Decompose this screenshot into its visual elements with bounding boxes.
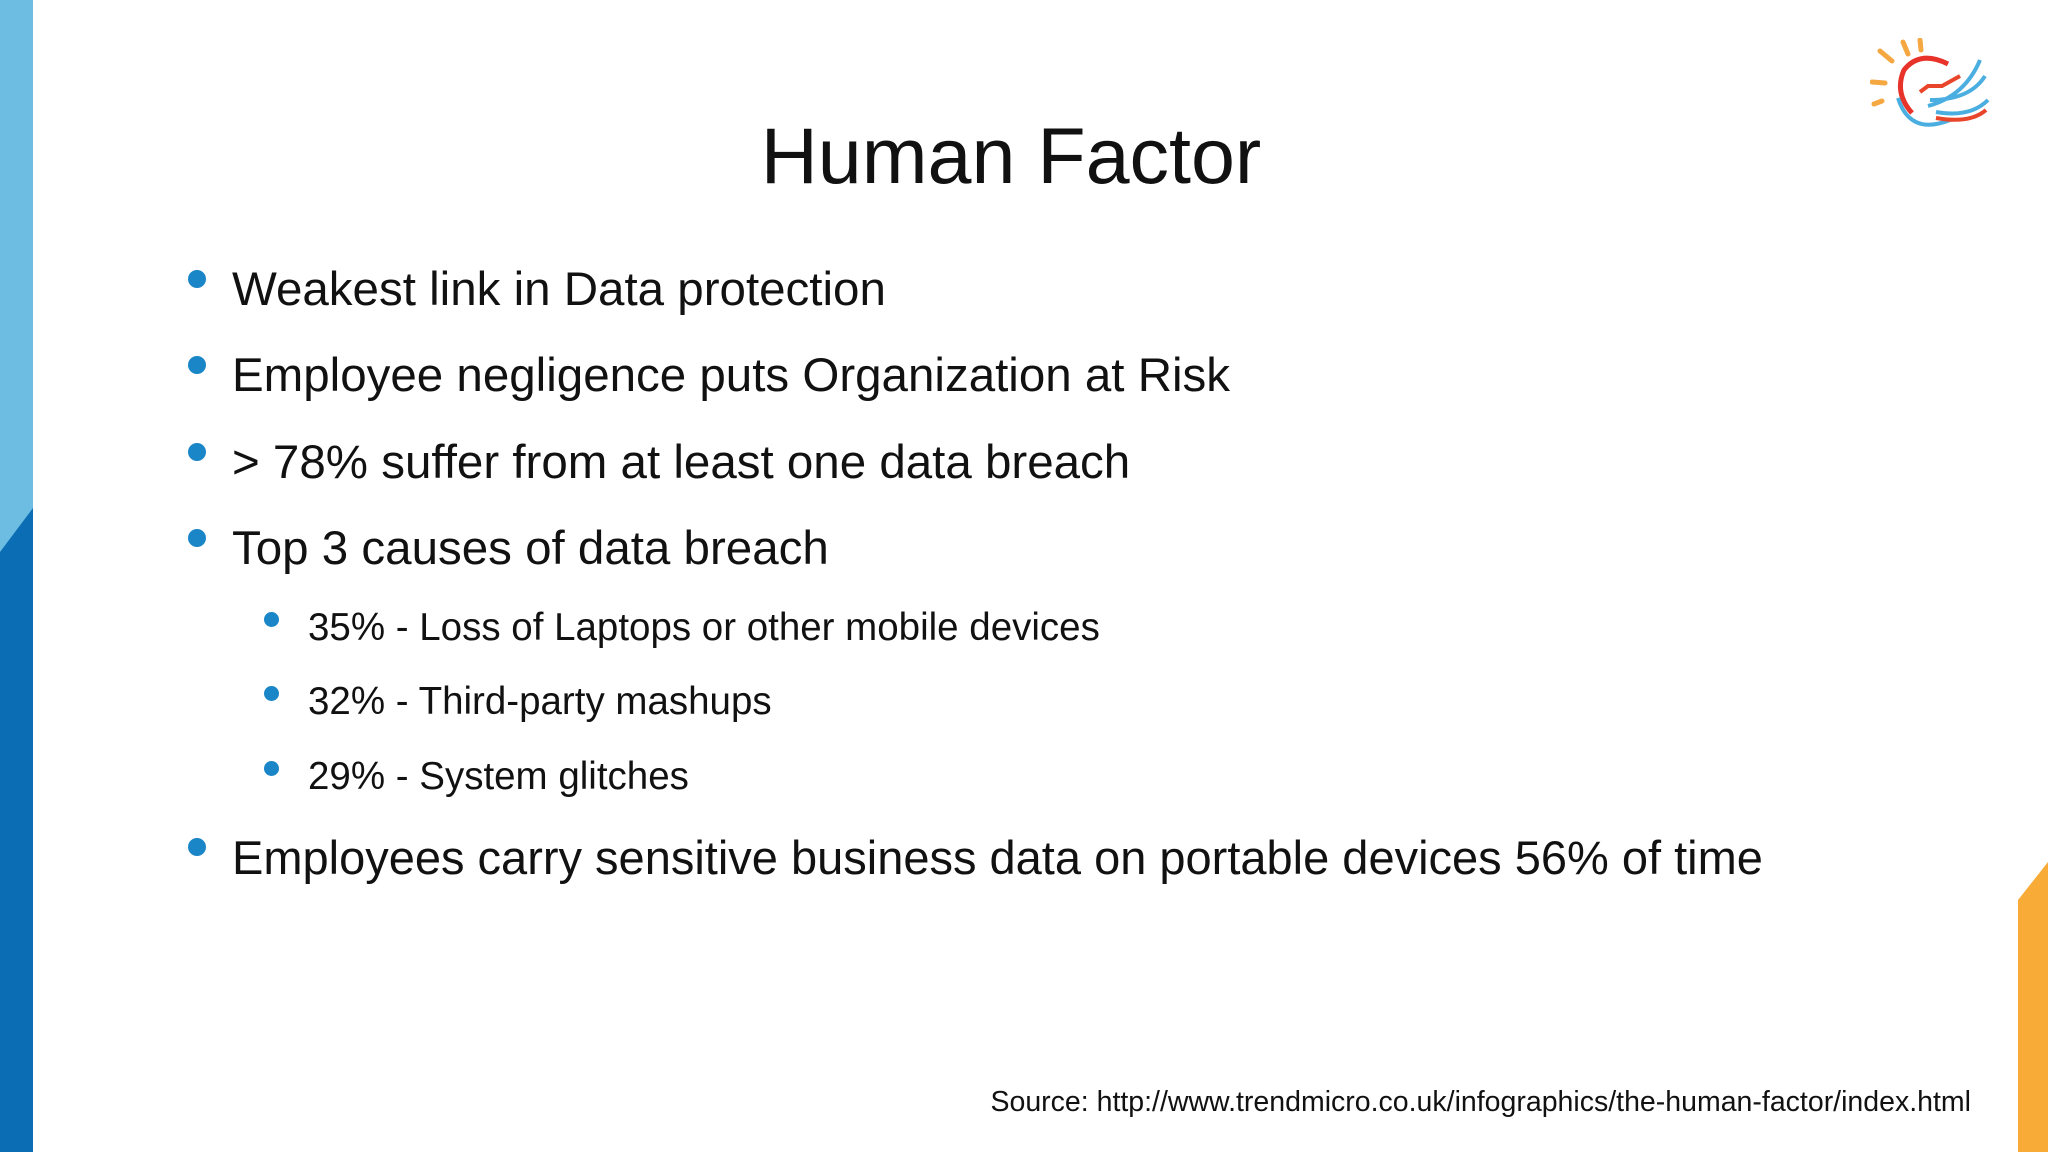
source: Source: http://www.trendmicro.co.uk/infographics/the-human-factor/index.html (990, 1086, 1971, 1118)
bullet list: Employee negligence puts Organization at Risk (232, 349, 1230, 402)
title: Human Factor (761, 111, 1261, 200)
bullet list: Weakest link in Data protection (232, 263, 886, 316)
bullet list: 29% - System glitches (308, 755, 689, 798)
logo (1870, 38, 1990, 127)
right orange accent (2018, 862, 2048, 1152)
bullet 3 (188, 436, 1130, 489)
bullet list: Employees carry sensitive business data on portable devices 56% of time (232, 831, 1763, 884)
bullet list: > 78% suffer from at least one data breach (232, 436, 1130, 489)
bullet 1 (188, 263, 886, 316)
sub bullet 3 (264, 755, 689, 798)
sub bullet 1 (264, 606, 1100, 649)
left accent bar (0, 0, 33, 1152)
bullet 5 (188, 831, 1763, 884)
bullet list: 32% - Third-party mashups (308, 680, 772, 723)
bullet list: Top 3 causes of data breach (232, 522, 829, 575)
bullet 4 (188, 522, 829, 575)
sub bullet 2 (264, 680, 772, 723)
bullet list: 35% - Loss of Laptops or other mobile devices (308, 606, 1100, 649)
bullet list (188, 263, 1763, 884)
bullet 2 (188, 349, 1230, 402)
